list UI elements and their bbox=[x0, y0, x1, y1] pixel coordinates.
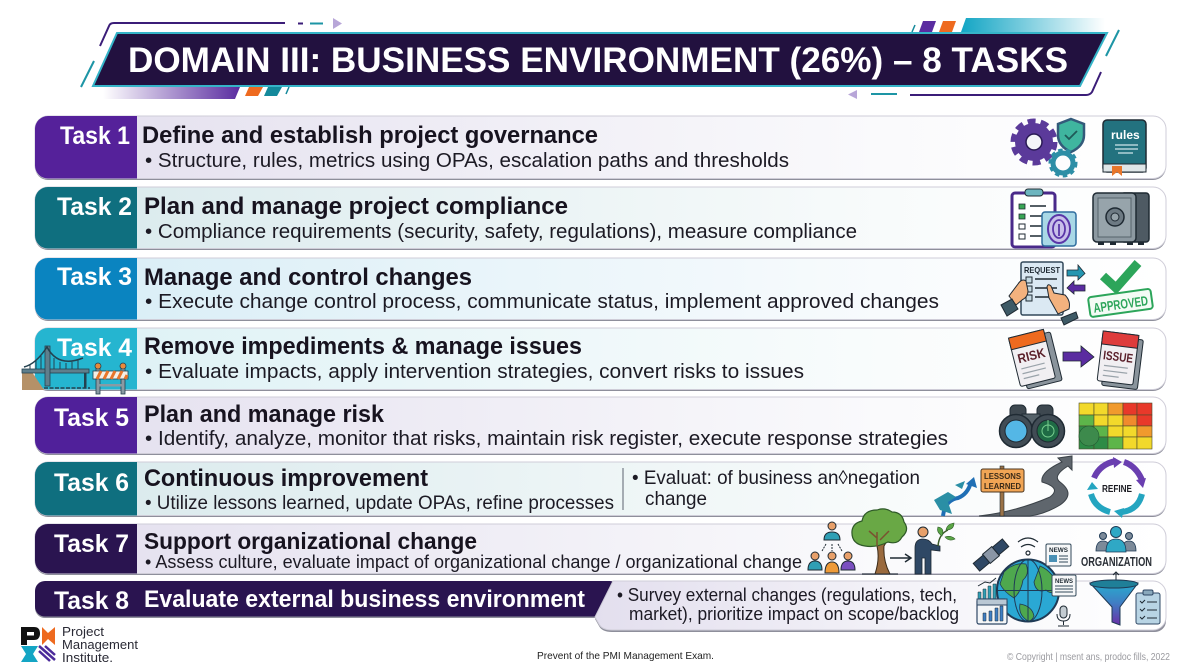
panel: task 1 bbox=[35, 116, 1166, 180]
panel: task 1: Define and establish project governance bbox=[142, 122, 598, 149]
panel: task 2: • Compliance requirements (security, safety, regulations), measure compliance bbox=[145, 221, 857, 243]
icon: approved check and stamp bbox=[1088, 263, 1153, 317]
icon: exchange arrows bbox=[1067, 265, 1085, 294]
icon: rules book: rules bbox=[1111, 128, 1140, 142]
icon: news card lower bbox=[1052, 575, 1076, 596]
icon: checklist clipboard with fingerprint bbox=[1012, 189, 1076, 247]
panel: task 6: change bbox=[645, 488, 707, 510]
icon: risk page: RISK bbox=[1016, 345, 1047, 366]
icon: risk heat map bbox=[1079, 403, 1152, 449]
icon: data charts bbox=[977, 578, 1007, 624]
icon: rules book bbox=[1103, 120, 1146, 176]
icon: satellite bbox=[973, 538, 1009, 572]
icon: arrow risk to issue bbox=[1063, 346, 1094, 367]
panel: task 7 bbox=[35, 524, 1166, 575]
panel: task 3: Task 3 bbox=[57, 263, 132, 291]
icon: issue page: ISSUE bbox=[1102, 348, 1134, 366]
panel: task 8: • Survey external changes (regulations, tech, bbox=[617, 585, 957, 605]
icon: arrow to person bbox=[890, 554, 911, 562]
icon: wifi signal bbox=[1018, 538, 1038, 555]
icon: news card lower: NEWS bbox=[1055, 578, 1074, 585]
logo: Project Management Institute: Management bbox=[62, 637, 138, 652]
panel: task 5: • Identify, analyze, monitor that risks, maintain risk register, execute response strategies bbox=[145, 428, 948, 450]
icon: binoculars bbox=[1000, 405, 1064, 448]
panel: task 6: Continuous improvement bbox=[144, 465, 428, 492]
icon: barricade bbox=[93, 363, 128, 394]
panel: task 4: Task 4 bbox=[57, 334, 132, 362]
panel: task 8: market), prioritize impact on scope/backlog bbox=[629, 604, 959, 624]
icon: person with plant bbox=[915, 523, 955, 574]
panel: task 7: Support organizational change bbox=[144, 528, 477, 554]
icon: lessons learned road: LEARNED bbox=[984, 481, 1021, 491]
icon: gears and shield bbox=[1013, 119, 1084, 176]
icon: risk page bbox=[1008, 328, 1062, 390]
panel: task 2: Plan and manage project compliance bbox=[144, 193, 568, 220]
icon: safe bbox=[1093, 193, 1149, 245]
panel: task 1: • Structure, rules, metrics using OPAs, escalation paths and thresholds bbox=[145, 150, 789, 172]
icon: issue page bbox=[1097, 331, 1144, 390]
panel: task 5: Task 5 bbox=[54, 404, 129, 432]
footer note: Prevent of the PMI Management Exam. bbox=[537, 650, 714, 662]
panel: task 6 bbox=[35, 462, 1166, 517]
panel: task 6: Task 6 bbox=[54, 469, 129, 497]
icon: news card bbox=[1046, 544, 1071, 566]
icon: bridge bbox=[22, 346, 90, 390]
icon: refine cycle bbox=[1087, 457, 1146, 518]
logo: Project Management Institute: Project bbox=[62, 624, 104, 639]
copyright: © Copyright | msent ans, prodoc fills, 2022 bbox=[1007, 652, 1170, 663]
icon: lessons learned road bbox=[979, 456, 1072, 516]
panel: task 3: • Execute change control process, communicate status, implement approved changes bbox=[145, 291, 939, 313]
panel: task 4: Remove impediments & manage issues bbox=[144, 333, 582, 360]
icon: tree bbox=[852, 509, 907, 574]
panel: task 2: Task 2 bbox=[57, 193, 132, 221]
panel: task 6: • Utilize lessons learned, update OPAs, refine processes bbox=[145, 493, 614, 514]
icon: organization hierarchy people bbox=[808, 522, 855, 573]
icon: checklist bbox=[1136, 590, 1160, 624]
panel: task 7: Task 7 bbox=[54, 530, 129, 558]
panel: task 3: Manage and control changes bbox=[144, 264, 472, 291]
icon: organization people: ORGANIZATION bbox=[1081, 555, 1152, 569]
logo: Project Management Institute bbox=[21, 624, 138, 665]
panel: task 8: Task 8 bbox=[54, 587, 129, 615]
panel: task 5 bbox=[35, 397, 1166, 455]
icon: news card: NEWS bbox=[1049, 547, 1069, 554]
panel: task 1: Task 1 bbox=[60, 122, 130, 150]
icon: request form with hands bbox=[1001, 262, 1078, 325]
title text: DOMAIN III: BUSINESS ENVIRONMENT (26%) – 8 TASKS bbox=[128, 41, 1068, 80]
panel: task 7: • Assess culture, evaluate impact of organizational change / organizational change bbox=[145, 551, 802, 572]
panel: task 8: Evaluate external business environment bbox=[144, 586, 585, 613]
title banner bbox=[81, 18, 1119, 99]
icon: globe bbox=[997, 560, 1059, 622]
icon: microphone bbox=[1057, 606, 1070, 626]
panel: task 5: Plan and manage risk bbox=[144, 401, 385, 428]
panel: task 3 bbox=[35, 258, 1166, 321]
icon: approved check and stamp: APPROVED bbox=[1092, 293, 1149, 316]
icon: funnel bbox=[1090, 580, 1138, 625]
panel: task 4: • Evaluate impacts, apply intervention strategies, convert risks to issues bbox=[145, 361, 804, 383]
icon: organization people bbox=[1081, 526, 1152, 580]
panel: task 6: • Evaluat: of business an◊negation bbox=[632, 467, 920, 489]
logo: Project Management Institute: Institute. bbox=[62, 650, 113, 665]
icon: refine cycle: REFINE bbox=[1102, 483, 1132, 495]
icon: request form with hands: REQUEST bbox=[1024, 265, 1061, 275]
icon: lessons learned road: LESSONS bbox=[984, 471, 1021, 481]
panel: task 2 bbox=[35, 187, 1166, 250]
panel: task 8 bbox=[35, 581, 1166, 632]
panel: task 4 bbox=[35, 328, 1166, 391]
icon: blue growth arrow bbox=[934, 477, 977, 516]
